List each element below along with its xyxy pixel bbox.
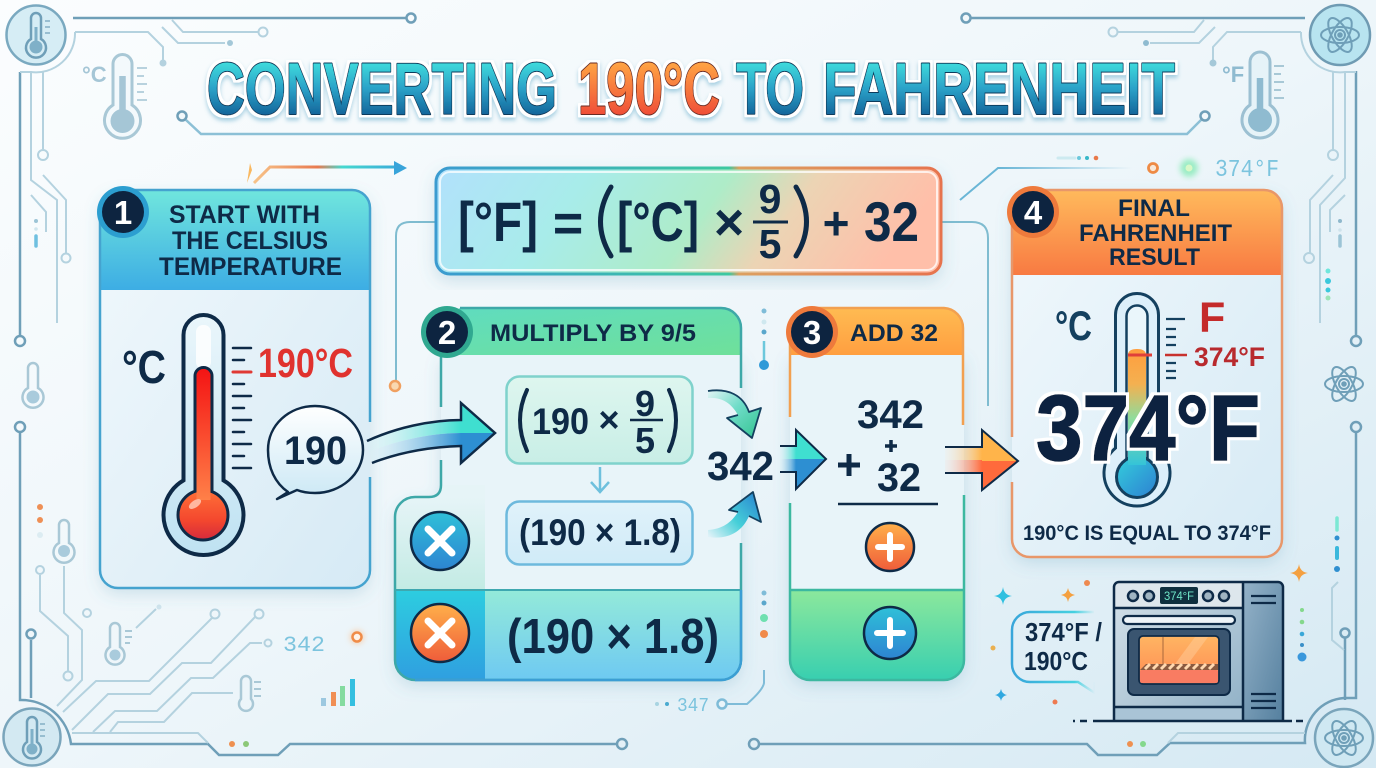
step badge 1: 1: [114, 194, 132, 231]
decorative dots: [37, 156, 1340, 747]
panel: step 3 add 32: [786, 306, 964, 680]
speech bubble 190: [268, 406, 363, 499]
panel: step 4 final result: [1007, 186, 1282, 557]
status lights: [350, 159, 1198, 644]
expression box 190 × 9/5: [506, 376, 692, 464]
panel: formula: [436, 168, 941, 274]
formula text: [°F]: [458, 190, 538, 253]
icon: fahrenheit thermometer: [1104, 294, 1187, 506]
title: [207, 49, 1175, 130]
arrow: step 1 to step 2: [367, 403, 495, 463]
icon: thermometer °C top-left decoration: °C: [82, 62, 107, 87]
step 2 heading: MULTIPLY BY 9/5: [490, 320, 696, 347]
arrow: curved to 342 top: [708, 390, 761, 438]
arrow: curved to 342 bottom: [708, 492, 761, 538]
label 374°F small: 374°F: [1194, 342, 1265, 372]
column addition: [838, 393, 938, 504]
result caption: 190°C IS EQUAL TO 374°F: [1023, 522, 1271, 545]
sparkles: [990, 564, 1308, 704]
panel: step 2 multiply by 9/5: [395, 306, 741, 680]
title: CONVERTING: [207, 49, 557, 130]
formula text: =: [553, 195, 583, 253]
label °C: °C: [1055, 302, 1092, 349]
step 1 heading: [159, 201, 342, 281]
step 3 heading: ADD 32: [850, 320, 938, 347]
callout: oven temperature: [1012, 612, 1102, 693]
arrow: curved to 342 bottom outline: [729, 492, 761, 522]
formula text: 9: [759, 176, 781, 222]
step badge 3: 3: [803, 314, 821, 351]
step badge 3: [786, 306, 838, 358]
step 3 header: [790, 308, 964, 355]
expression box 190 × 1.8: (190 × 1.8): [519, 512, 681, 553]
column addition: 342: [857, 393, 924, 437]
big result value: 374°F: [1036, 376, 1260, 480]
icon: plus blue: [864, 607, 916, 659]
corner icon: thermometer bottom-left: [4, 708, 60, 766]
step 4 header: [1012, 190, 1282, 275]
formula text: 32: [864, 190, 919, 253]
panel: step 1 start with celsius: [97, 186, 370, 588]
arrow: down: [591, 467, 609, 492]
label 190°C: 190°C: [258, 340, 353, 386]
icon: celsius thermometer: [163, 315, 251, 555]
mini bar chart: [321, 679, 355, 706]
step 4 heading: FINAL: [1118, 195, 1190, 222]
corner icon: atom bottom-right: [1315, 709, 1373, 767]
bottom band: [395, 590, 741, 680]
digital readout 347: 347: [677, 695, 709, 717]
formula text: +: [823, 197, 849, 249]
icon: atom right decoration: [1325, 364, 1363, 404]
column addition: 32: [877, 456, 921, 500]
step 4 heading: RESULT: [1109, 244, 1200, 271]
arrow: step 3 to step 4: [945, 430, 1018, 490]
formula text: ×: [714, 194, 744, 252]
expression box 190 × 9/5: 190: [532, 401, 589, 442]
formula text: [°C]: [617, 190, 699, 253]
icon: plus orange: [866, 523, 914, 571]
step badge 2: [421, 306, 473, 358]
corner icon: atom top-right: [1310, 5, 1370, 65]
step 2 header: [441, 308, 741, 355]
arrow: top spark: [247, 161, 407, 183]
corner icon: thermometer top-left: [6, 6, 66, 64]
digital readout 342: 342: [283, 633, 325, 658]
expression box 190 × 9/5: 5: [635, 420, 655, 461]
step badge 2: 2: [438, 314, 456, 351]
label °C: °C: [122, 341, 166, 393]
expression box 190 × 1.8: [506, 502, 692, 564]
step 4 heading: FAHRENHEIT: [1079, 220, 1232, 247]
label F: F: [1199, 294, 1225, 342]
formula text: 5: [759, 221, 781, 267]
icon: multiply blue: [411, 512, 469, 570]
step badge 4: 4: [1024, 194, 1043, 231]
intermediate value 342: 342: [707, 443, 774, 489]
step badge 4: [1007, 186, 1059, 238]
green band: [790, 590, 964, 680]
callout: oven temperature: 190°C: [1024, 646, 1088, 676]
step badge 1: [97, 186, 149, 238]
formula text: [458, 176, 919, 267]
result expression: (190 × 1.8): [507, 610, 719, 664]
title: FAHRENHEIT: [823, 49, 1175, 130]
arrow: curved to 342 top outline: [708, 390, 761, 438]
oven display: 374°F: [1164, 591, 1194, 603]
small decorative thermometers: [22, 363, 261, 711]
step 1 header: [100, 190, 370, 290]
speech bubble 190: 190: [284, 429, 347, 473]
step 1 heading: THE CELSIUS: [172, 227, 328, 255]
icon: oven: [1073, 582, 1303, 721]
icon: thermometer °C top-left decoration: [82, 54, 147, 138]
expression box 190 × 9/5: ×: [598, 399, 620, 440]
title: TO: [736, 49, 804, 130]
icon: thermometer °F top-right decoration: °F: [1222, 62, 1244, 87]
title underline: [178, 112, 1210, 134]
icon: multiply orange: [411, 604, 469, 662]
title: 190°C: [578, 49, 720, 130]
arrow: 342 to step 3: [780, 430, 826, 489]
expression box 190 × 9/5: 9: [635, 383, 655, 424]
digital readout 374°F: 374°F: [1215, 157, 1279, 184]
step 4 heading: [1079, 195, 1232, 271]
step 1 heading: START WITH: [169, 201, 320, 229]
connector lines from formula: [390, 168, 1132, 406]
callout: oven temperature: 374°F /: [1025, 617, 1102, 647]
icon: thermometer °F top-right decoration: [1222, 52, 1284, 138]
step 1 heading: TEMPERATURE: [159, 253, 342, 281]
